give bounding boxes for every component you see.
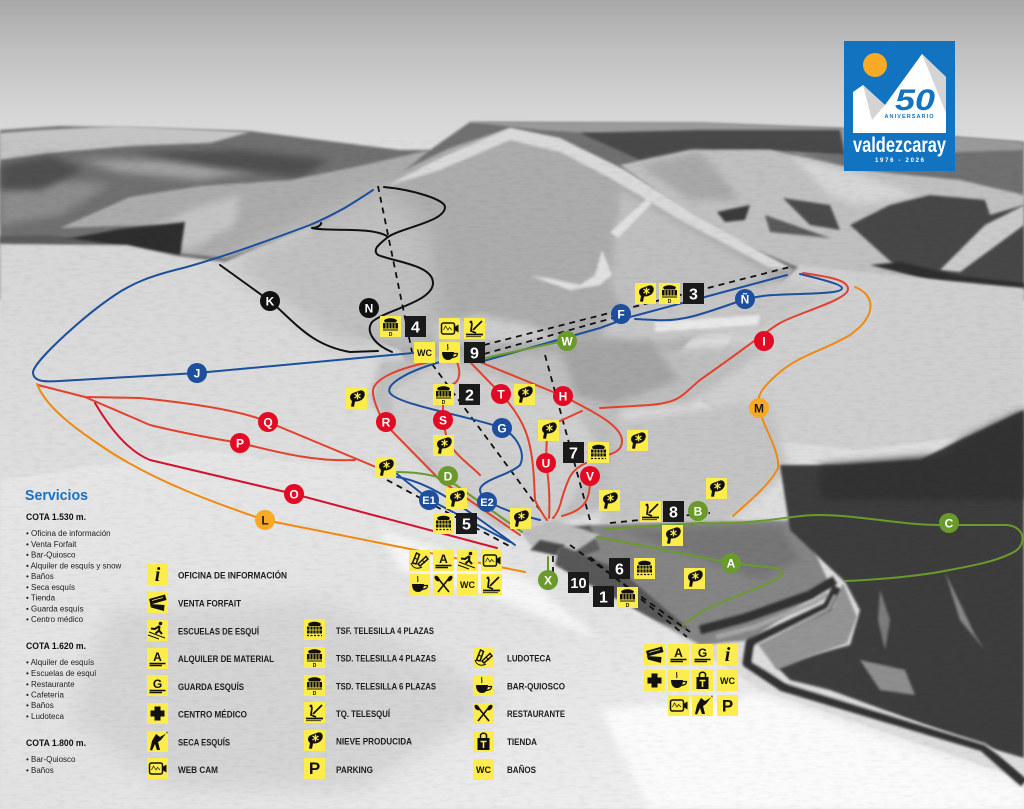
badge V: V <box>586 470 594 484</box>
road <box>700 580 1024 783</box>
icon: nieve <box>599 490 620 511</box>
badge G <box>492 418 512 438</box>
badge L: L <box>261 514 269 528</box>
icon: telesilla 5 <box>433 513 454 534</box>
icon: telesilla 2: D <box>442 400 446 406</box>
text block: cota 1530: • Baños <box>26 572 54 581</box>
badge H <box>553 386 573 406</box>
lift 7 <box>563 442 584 463</box>
text block: cota 1620: COTA 1.620 m. <box>26 641 86 652</box>
badge I <box>754 331 774 351</box>
forest <box>775 410 1024 758</box>
heading: servicios: Servicios <box>25 488 88 504</box>
text block: cota 1620: • Ludoteca <box>26 712 64 721</box>
text block: cota 1530: • Alquiler de esquís y snow <box>26 562 122 570</box>
legend: services column 3 <box>473 647 565 780</box>
panel: servicios <box>25 488 122 775</box>
lift 6: 6 <box>615 562 624 578</box>
icon: parking <box>717 695 738 716</box>
icon: baños <box>457 574 478 595</box>
legend item: tsd 6 <box>304 675 436 697</box>
icon: telesilla 3: D <box>668 299 672 305</box>
black slopes <box>220 187 445 352</box>
icon: seca esquís <box>692 695 713 716</box>
icon: nieve <box>510 508 531 529</box>
badge U: U <box>542 456 550 470</box>
badge H: H <box>559 390 567 404</box>
icon: nieve <box>446 488 467 509</box>
icon: restaurante <box>433 574 454 595</box>
icon: nieve <box>706 478 727 499</box>
legend item: restaurante: RESTAURANTE <box>507 709 565 719</box>
lift 5 <box>456 513 477 534</box>
lift lines <box>378 186 790 637</box>
icon: nieve <box>538 420 559 441</box>
icon: nieve <box>433 435 454 456</box>
legend item: guarda: G <box>153 677 162 691</box>
badge P: P <box>236 436 244 450</box>
lift 6 <box>609 558 630 579</box>
icon: nieve <box>627 430 648 451</box>
logo: Valdezcaray 50 aniversario: 50 <box>895 84 935 117</box>
legend item: forfait <box>147 592 241 613</box>
badge T: T <box>497 388 505 402</box>
badge S: S <box>439 414 447 428</box>
legend item: baños <box>473 759 536 780</box>
badge E2 <box>477 492 497 512</box>
icon: telesilla 4 <box>380 316 401 338</box>
icon: centro médico <box>644 670 665 691</box>
badge R <box>376 412 396 432</box>
logo: Valdezcaray 50 aniversario <box>844 41 955 171</box>
legend: services column 2 <box>304 619 436 779</box>
badge N <box>359 298 379 318</box>
text block: cota 1530: • Bar-Quiosco <box>26 550 76 560</box>
text block: cota 1620: • Baños <box>26 701 54 710</box>
icon: bar <box>409 574 430 595</box>
icon: bar <box>439 342 460 363</box>
text block: cota 1530: • Oficina de información <box>26 529 111 538</box>
icon: ludoteca <box>409 550 430 571</box>
badge L <box>255 510 275 530</box>
legend item: bar: BAR-QUIOSCO <box>507 682 565 692</box>
legend item: alquiler: ALQUILER DE MATERIAL <box>178 654 274 664</box>
legend item: baños: WC <box>476 765 491 775</box>
legend item: oficina <box>147 564 287 586</box>
legend item: nieve <box>304 730 412 751</box>
icon: nieve <box>684 568 705 589</box>
icon: alquiler: A <box>674 646 683 660</box>
text block: cota 1620: • Restaurante <box>26 680 75 689</box>
badge E2: E2 <box>480 497 494 509</box>
icon: información <box>717 644 738 666</box>
legend item: guarda <box>147 675 244 696</box>
text block: cota 1530: COTA 1.530 m. <box>26 512 86 523</box>
icon: telesquí <box>481 574 502 595</box>
badge D <box>438 466 458 486</box>
badge B <box>688 501 708 521</box>
lift 9 <box>464 342 485 363</box>
badge X <box>538 570 558 590</box>
lift 1: 1 <box>599 590 608 606</box>
icon: baños <box>414 342 435 363</box>
lift 9: 9 <box>470 346 479 362</box>
legend item: alquiler: A <box>153 650 162 664</box>
legend item: forfait: VENTA FORFAIT <box>178 598 241 608</box>
legend item: tienda: TIENDA <box>507 737 537 747</box>
legend item: guarda: GUARDA ESQUÍS <box>178 682 244 692</box>
icon: web cam <box>668 695 689 716</box>
text block: cota 1800: COTA 1.800 m. <box>26 738 86 749</box>
icon: tienda <box>692 670 713 691</box>
legend item: tsd 6: D <box>313 691 317 697</box>
lift 3 <box>683 283 704 304</box>
logo: Valdezcaray 50 aniversario: valdezcaray <box>853 134 946 157</box>
legend item: oficina: i <box>155 564 161 586</box>
text block: cota 1530: • Tienda <box>26 594 56 602</box>
green slopes <box>397 340 1023 625</box>
legend item: médico: CENTRO MÉDICO <box>178 710 247 720</box>
legend item: escuelas: ESCUELAS DE ESQUÍ <box>178 626 259 636</box>
badge A: A <box>727 556 736 570</box>
lift 2: 2 <box>465 388 474 404</box>
lift 1 <box>593 586 614 607</box>
icon: telesilla 3 <box>659 283 680 305</box>
blue slopes <box>33 190 842 545</box>
icon: telesilla 7 <box>588 442 609 463</box>
lift 3: 3 <box>689 286 698 304</box>
icon: baños: WC <box>460 580 475 590</box>
badge G: G <box>497 422 507 436</box>
badge O: O <box>289 488 299 502</box>
badge X: X <box>544 574 552 588</box>
badge W <box>557 331 577 351</box>
icon: baños: WC <box>720 676 735 686</box>
icon: guarda esquís <box>692 644 713 665</box>
legend item: seca <box>147 731 230 752</box>
legend item: médico <box>147 703 247 724</box>
text block: cota 1800: • Bar-Quiosco <box>26 755 76 764</box>
legend item: baños: BAÑOS <box>507 765 536 775</box>
badge W: W <box>561 334 573 348</box>
icon: baños: WC <box>417 348 432 358</box>
icon: telesquí <box>640 501 661 522</box>
legend item: tsf <box>304 619 434 640</box>
icon: telesquí <box>464 318 485 339</box>
badge V <box>580 466 600 486</box>
badge C: C <box>945 516 954 530</box>
text block: cota 1530 <box>26 512 122 624</box>
slope badges <box>187 289 959 590</box>
text block: cota 1530: • Seca esquís <box>26 583 75 592</box>
icon: web cam <box>439 318 460 339</box>
icon: bar <box>668 670 689 691</box>
red slopes <box>38 273 848 548</box>
legend item: webcam: WEB CAM <box>178 765 218 775</box>
badge Q <box>258 412 278 432</box>
badge R: R <box>382 416 391 430</box>
icon: web cam <box>481 550 502 571</box>
icon: guarda esquís: G <box>698 646 707 660</box>
badge S <box>433 410 453 430</box>
text block: cota 1530: • Guarda esquís <box>26 604 84 614</box>
icon: nieve <box>635 283 656 304</box>
badge Q: Q <box>263 416 273 430</box>
icon: escuela <box>457 550 478 571</box>
badge M: M <box>754 402 764 416</box>
badge B: B <box>694 504 703 518</box>
legend item: seca: SECA ESQUÍS <box>178 738 230 748</box>
legend item: parking: PARKING <box>336 765 373 775</box>
legend item: tsd 4: TSD. TELESILLA 4 PLAZAS <box>336 654 436 664</box>
lift 8: 8 <box>669 504 678 522</box>
legend item: parking <box>304 758 373 779</box>
text block: cota 1620: • Cafetería <box>26 690 64 700</box>
badge P <box>230 433 250 453</box>
legend item: telesquí: TQ. TELESQUÍ <box>336 709 390 719</box>
text block: cota 1620: • Alquiler de esquís <box>26 658 94 667</box>
icon: nieve <box>375 457 396 478</box>
legend item: tsd 4: D <box>313 663 317 669</box>
icon: baños <box>717 670 738 691</box>
lift 2 <box>459 384 480 405</box>
badge N: N <box>365 302 373 316</box>
icon: nieve <box>662 525 683 546</box>
legend item: alquiler <box>147 648 274 669</box>
lift 8 <box>663 501 684 522</box>
icon: alquiler: A <box>439 552 448 566</box>
badge Ñ <box>735 289 755 309</box>
legend item: webcam <box>147 758 218 779</box>
logo: Valdezcaray 50 aniversario: 1976 - 2026 <box>875 158 925 164</box>
badge J: J <box>194 366 200 380</box>
badge I: I <box>762 334 766 348</box>
icon: información: i <box>725 644 731 666</box>
badge C <box>939 513 959 533</box>
badge F <box>611 304 631 324</box>
legend item: nieve: NIEVE PRODUCIDA <box>336 736 412 746</box>
icon: telesilla 2 <box>433 384 454 406</box>
orange slopes <box>37 287 871 572</box>
badge T <box>491 384 511 404</box>
badge A <box>721 553 741 573</box>
icon: forfait <box>644 644 665 665</box>
text block: cota 1530: • Centro médico <box>26 615 84 624</box>
badge M <box>749 398 769 418</box>
text block: cota 1800: • Baños <box>26 766 54 775</box>
icon: nieve <box>346 388 367 409</box>
legend item: parking: P <box>309 759 320 778</box>
legend item: escuelas <box>147 620 259 641</box>
badge E1: E1 <box>422 495 436 507</box>
text block: cota 1800 <box>26 738 86 775</box>
badge K <box>260 291 280 311</box>
icon: alquiler <box>668 644 689 665</box>
icon: telesilla 4: D <box>389 332 393 338</box>
central peak <box>250 128 795 410</box>
lift 10 <box>568 572 589 593</box>
legend item: oficina: OFICINA DE INFORMACIÓN <box>178 570 287 580</box>
badge O <box>284 484 304 504</box>
badge E1 <box>419 490 439 510</box>
badge K: K <box>266 294 275 308</box>
icon: telesilla 1 <box>617 587 638 609</box>
legend item: tsd 6: TSD. TELESILLA 6 PLAZAS <box>336 682 436 692</box>
lift 5: 5 <box>462 516 471 534</box>
icon: telesilla 6 <box>634 558 655 579</box>
lift 4: 4 <box>411 320 420 336</box>
text block: cota 1620: • Escuelas de esquí <box>26 669 97 678</box>
lift 10: 10 <box>570 576 587 592</box>
map service icons <box>346 283 738 716</box>
legend item: tsf: TSF. TELESILLA 4 PLAZAS <box>336 626 434 636</box>
text block: cota 1530: • Venta Forfait <box>26 540 77 549</box>
legend item: tsd 4 <box>304 647 436 669</box>
icon: alquiler <box>433 550 454 571</box>
badge Ñ: Ñ <box>741 292 749 306</box>
legend: services column 1 <box>147 564 287 779</box>
text block: cota 1620 <box>26 641 97 721</box>
icon: telesilla 1: D <box>626 603 630 609</box>
legend item: telesquí <box>304 702 390 723</box>
badge F: F <box>617 308 625 322</box>
lift 7: 7 <box>569 446 578 462</box>
icon: parking: P <box>722 696 733 716</box>
lift 4 <box>405 316 426 337</box>
icon: nieve <box>514 384 535 405</box>
badge D: D <box>444 470 453 484</box>
badge J <box>187 363 207 383</box>
badge U <box>536 453 556 473</box>
lift numbers <box>405 283 704 607</box>
logo: Valdezcaray 50 aniversario: ANIVERSARIO <box>884 114 934 120</box>
legend item: ludoteca: LUDOTECA <box>507 654 551 664</box>
